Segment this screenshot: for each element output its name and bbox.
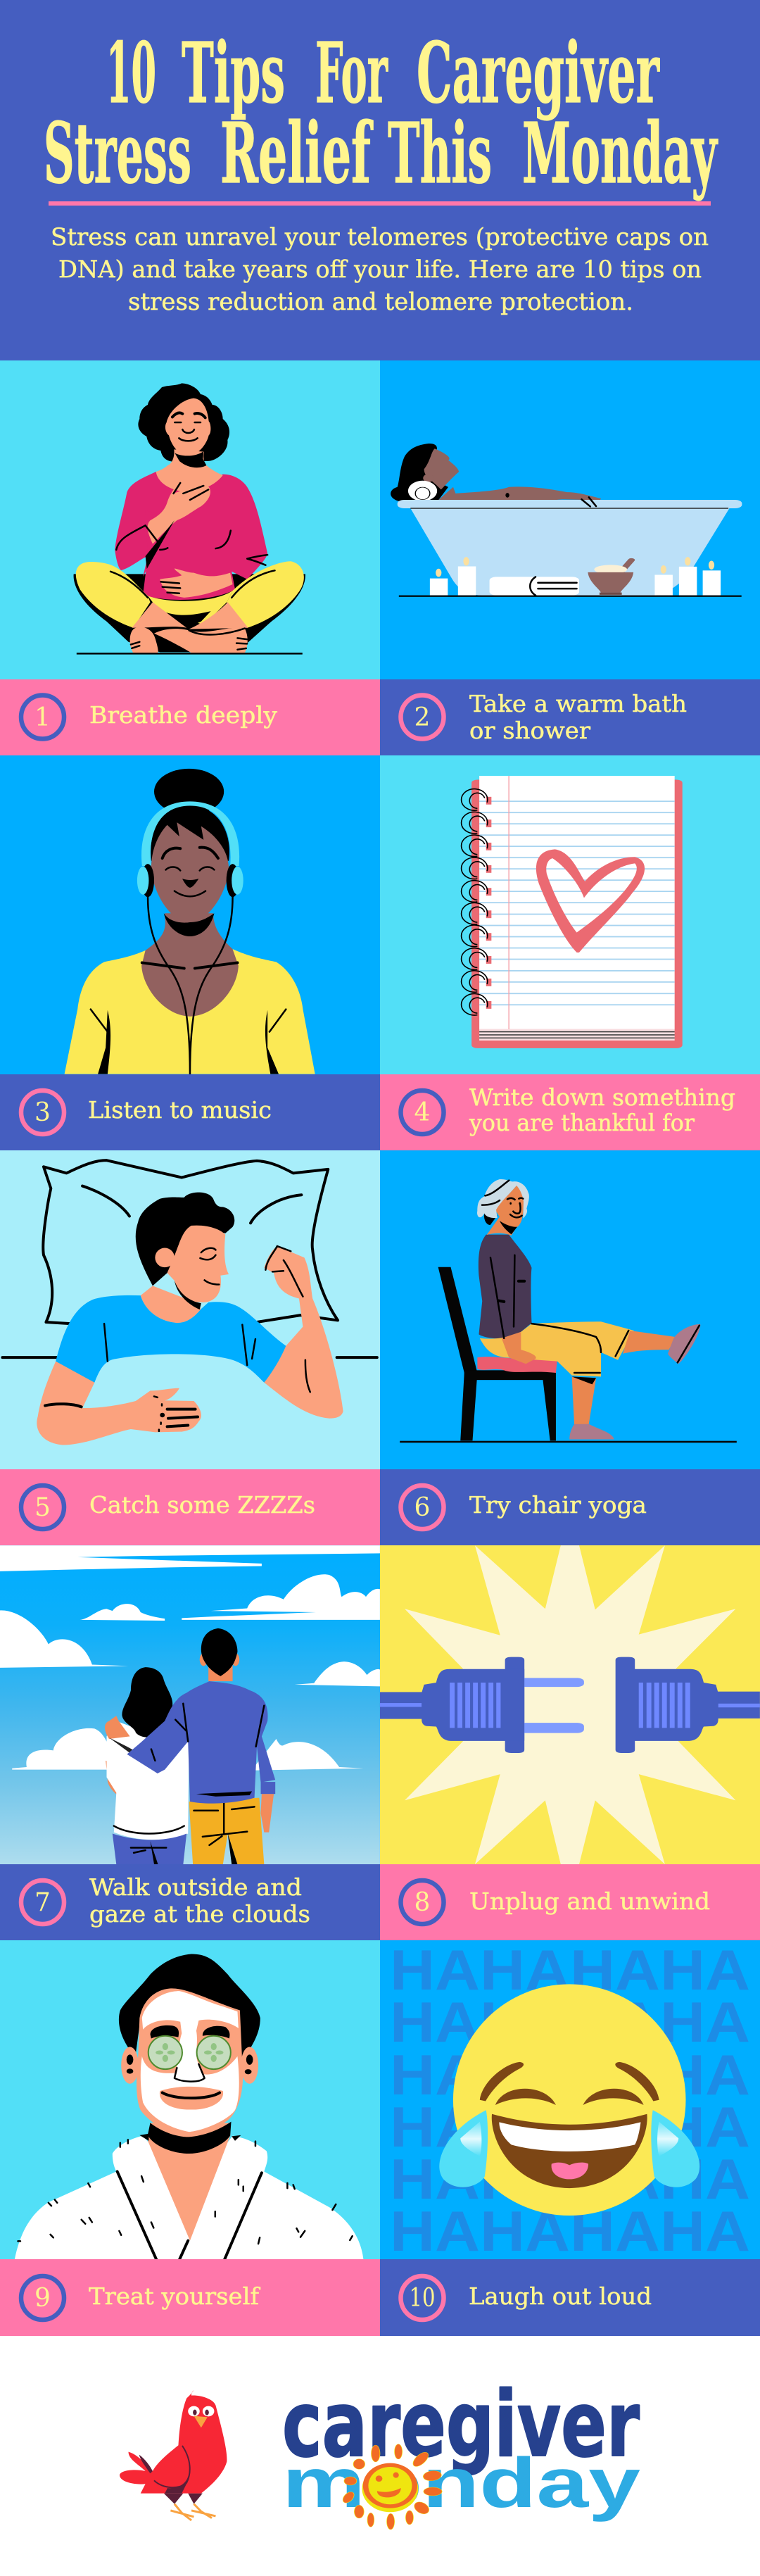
illustration: woman on chair — [400, 1179, 737, 1443]
background HAHA pattern — [390, 1939, 750, 2263]
background HAHA pattern: HAHAHAHA — [390, 1991, 750, 2054]
right plug — [616, 1657, 760, 1753]
caption text: you are thankful for — [469, 1109, 695, 1136]
title: For — [315, 24, 388, 122]
caption bar — [380, 1864, 760, 1940]
intro text: Stress can unravel your telomeres (protective caps on — [51, 223, 709, 251]
caption bar — [0, 679, 380, 755]
panel: tip 9 treat yourself — [0, 1940, 380, 2336]
hand-drawn heart — [536, 849, 645, 953]
woman — [105, 1667, 189, 1864]
intro text: DNA) and take years off your life. Here are 10 tips on — [58, 256, 702, 284]
caption text: gaze at the clouds — [89, 1900, 310, 1928]
illustration: woman meditating — [74, 383, 305, 655]
number badge — [401, 1091, 443, 1134]
caption bar — [0, 1864, 380, 1940]
icon: red cardinal bird — [120, 2390, 227, 2520]
left plug — [380, 1657, 584, 1753]
caption text — [469, 1083, 735, 1136]
number badge: 7 — [34, 1888, 51, 1917]
background HAHA pattern: HAHAHAHA — [390, 2148, 750, 2211]
head — [477, 1179, 529, 1236]
bowl — [588, 560, 633, 595]
illustration: man with face mask — [15, 1954, 364, 2260]
caption text — [89, 1873, 310, 1928]
caption text: Breathe deeply — [89, 701, 277, 729]
caption text: Catch some ZZZZs — [89, 1491, 315, 1519]
background HAHA pattern: HAHAHAHA — [390, 2044, 750, 2107]
background HAHA pattern: HAHAHAHA — [390, 1939, 750, 2002]
title: This — [388, 104, 492, 202]
number badge: 1 — [34, 703, 51, 732]
panel: tip 1 breathe deeply — [0, 360, 380, 755]
head — [138, 383, 229, 492]
illustration: couple gazing at clouds — [0, 1545, 380, 1864]
spiral binding — [462, 789, 491, 1015]
illustration: unplugged plugs — [380, 1545, 760, 1864]
illustration: man sleeping — [2, 1160, 377, 1445]
caption text: Try chair yoga — [469, 1491, 647, 1519]
number badge — [21, 696, 64, 739]
number badge — [401, 696, 443, 739]
headphones — [137, 864, 243, 1074]
caption text: Laugh out loud — [469, 2282, 652, 2310]
caption bar — [0, 1469, 380, 1545]
illustration: woman in bath — [391, 444, 742, 597]
number badge — [21, 2276, 64, 2320]
number badge — [401, 1485, 443, 1529]
intro text — [51, 223, 709, 316]
caption bar — [380, 1469, 760, 1545]
caption text: or shower — [469, 717, 590, 744]
title — [44, 24, 718, 202]
caption bar — [380, 1074, 760, 1150]
towel — [490, 577, 579, 596]
caption text: Unplug and unwind — [469, 1887, 710, 1915]
title: Stress — [44, 104, 191, 202]
burst — [405, 1545, 735, 1864]
number badge: 10 — [410, 2284, 435, 2313]
title: 10 — [106, 24, 156, 122]
caption bar — [0, 2259, 380, 2336]
number badge: 9 — [34, 2284, 51, 2313]
icon: smiling sun — [341, 2444, 445, 2530]
caption text: Treat yourself — [89, 2282, 261, 2310]
number badge — [21, 1485, 64, 1529]
logo: caregiver monday: caregiver — [282, 2373, 640, 2477]
panel: tip 6 chair yoga — [380, 1150, 760, 1545]
caption text: Listen to music — [88, 1096, 272, 1124]
illustration: notebook with heart — [462, 776, 683, 1048]
number badge: 6 — [414, 1493, 430, 1522]
number badge: 5 — [34, 1493, 51, 1522]
panel: tip 3 listen to music — [0, 755, 380, 1150]
panel: tip 4 write thankful — [380, 755, 760, 1150]
number badge: 2 — [414, 703, 430, 732]
intro text: stress reduction and telomere protection. — [128, 288, 633, 316]
number badge — [401, 1880, 443, 1924]
title: Relief — [220, 104, 374, 202]
illustration: woman with headphones — [65, 769, 315, 1074]
logo: caregiver monday — [282, 2373, 641, 2530]
pink title rule — [49, 201, 711, 206]
panel: tip 5 sleep — [0, 1150, 380, 1545]
background HAHA pattern: HAHAHAHA — [390, 2200, 750, 2263]
number badge — [21, 1880, 64, 1924]
background HAHA pattern: HAHAHAHA — [390, 2096, 750, 2159]
caption text: Write down something — [469, 1083, 735, 1111]
man — [109, 1628, 275, 1864]
footer logo area — [120, 2373, 641, 2530]
number badge: 3 — [34, 1098, 51, 1127]
caption text — [469, 690, 687, 744]
candles — [430, 557, 721, 596]
panel: tip 7 clouds — [0, 1545, 380, 1940]
panel: tip 8 unplug — [380, 1545, 760, 1940]
caption text: Take a warm bath — [469, 690, 687, 717]
number badge: 8 — [414, 1888, 430, 1917]
caption bar — [380, 2259, 760, 2336]
logo: caregiver monday: monday — [282, 2444, 641, 2522]
panel: header — [0, 0, 760, 360]
caption bar — [380, 679, 760, 755]
panel: tip 2 warm bath — [380, 360, 760, 755]
panel: tip 10 laugh — [380, 1939, 760, 2336]
number badge: 4 — [414, 1098, 430, 1127]
robe lines — [118, 2172, 262, 2260]
icon: laughing emoji — [439, 1984, 699, 2216]
caption bar — [0, 1074, 380, 1150]
clouds — [0, 1545, 380, 1771]
title: Tips — [182, 24, 285, 122]
number badge — [401, 2276, 443, 2320]
caption text: Walk outside and — [89, 1873, 302, 1901]
cucumbers — [148, 2036, 231, 2069]
number badge — [21, 1091, 64, 1134]
